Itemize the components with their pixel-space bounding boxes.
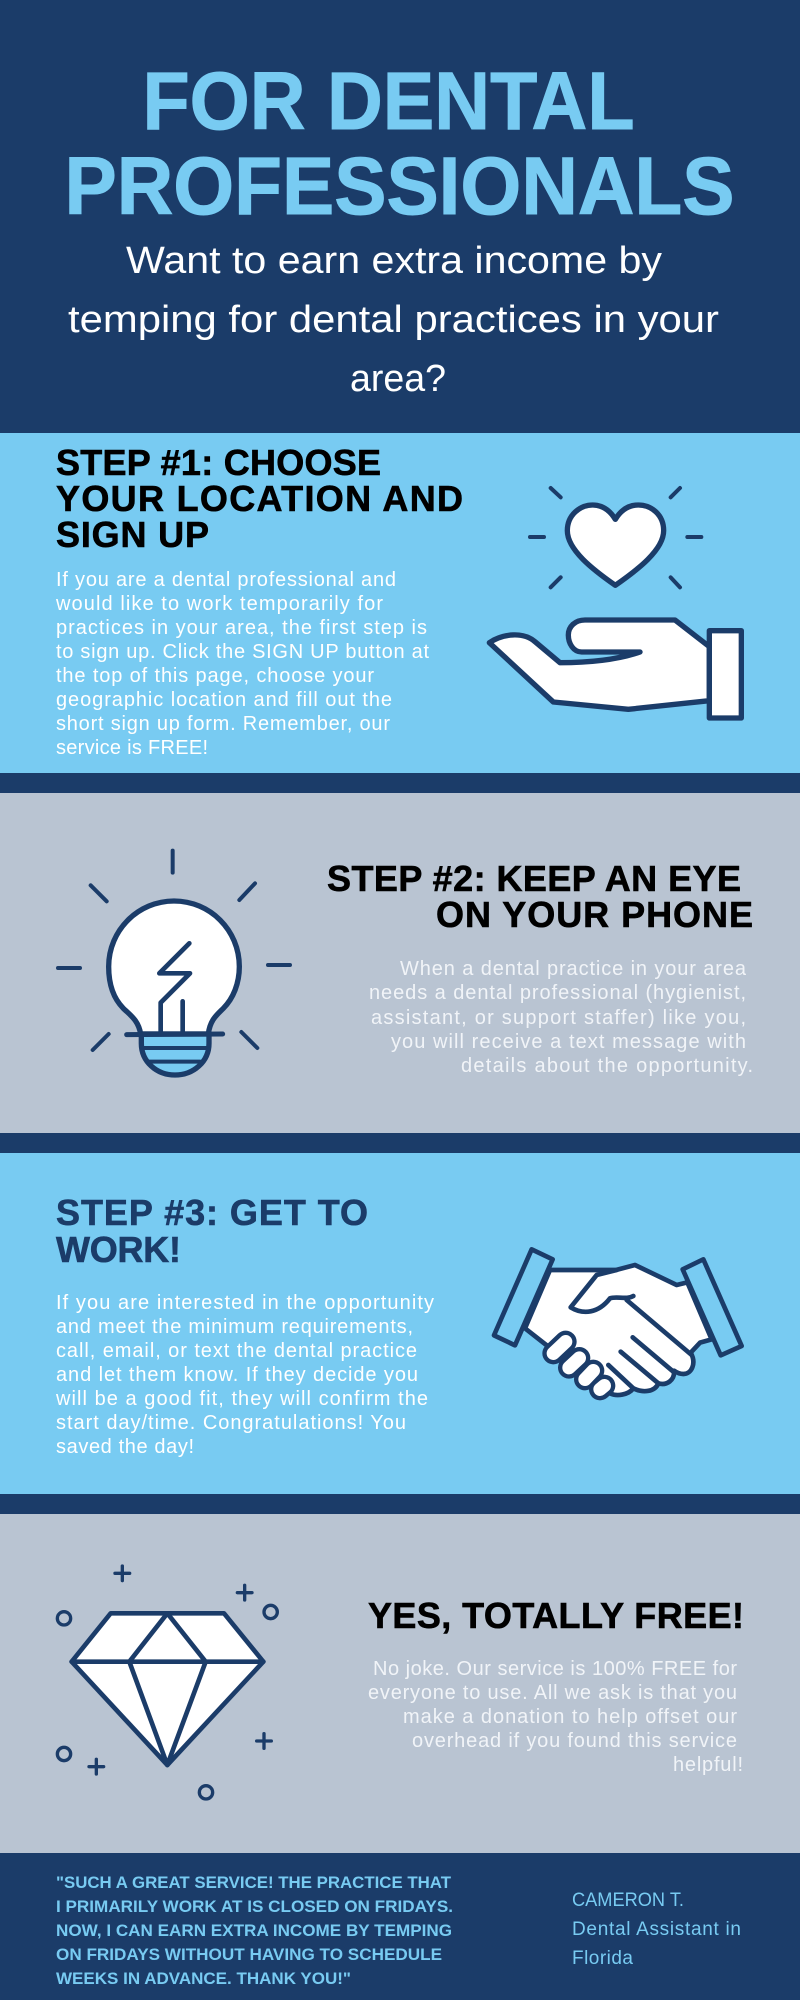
icon: light bulb: [58, 851, 290, 1075]
panel: testimonial footer: [0, 1853, 800, 2000]
title: PROFESSIONALS: [64, 141, 734, 232]
free body text: make a donation to help offset our: [403, 1706, 737, 1728]
panel: step 1: [0, 433, 800, 773]
panel: step 2: [0, 793, 800, 1133]
step 3 body text: will be a good fit, they will confirm the: [55, 1388, 428, 1410]
subtitle: temping for dental practices in your: [68, 299, 719, 341]
free body text: everyone to use. All we ask is that you: [368, 1682, 737, 1704]
step 3 body text: start day/time. Congratulations! You: [56, 1412, 406, 1434]
step 2 body text: When a dental practice in your area: [400, 958, 747, 980]
step 1 body text: geographic location and fill out the: [56, 689, 392, 711]
icon: hand holding heart: [489, 488, 741, 718]
testimonial quote: ON FRIDAYS WITHOUT HAVING TO SCHEDULE: [56, 1945, 442, 1964]
step 1 body text: [55, 569, 429, 759]
testimonial quote: WEEKS IN ADVANCE. THANK YOU!": [56, 1969, 351, 1988]
subtitle: [68, 240, 719, 400]
testimonial author: CAMERON T.: [572, 1890, 684, 1911]
step 2 heading: ON YOUR PHONE: [436, 894, 753, 935]
step 1 heading: SIGN UP: [56, 514, 209, 555]
step 1 body text: short sign up form. Remember, our: [56, 713, 390, 735]
header panel: [0, 0, 800, 433]
title: FOR DENTAL: [142, 56, 634, 147]
title: [64, 56, 734, 232]
step 3 body text: If you are interested in the opportunity: [56, 1292, 434, 1314]
step 1 body text: If you are a dental professional and: [56, 569, 396, 591]
step 3 body text: [55, 1292, 434, 1458]
testimonial author: Dental Assistant in: [572, 1919, 741, 1940]
testimonial quote: I PRIMARILY WORK AT IS CLOSED ON FRIDAYS.: [56, 1897, 453, 1916]
step 3 heading: WORK!: [56, 1229, 181, 1270]
testimonial author: Florida: [572, 1948, 633, 1969]
free heading: YES, TOTALLY FREE!: [368, 1595, 744, 1636]
step 3 heading: STEP #3: GET TO: [56, 1192, 368, 1233]
step 3 body text: and meet the minimum requirements,: [56, 1316, 413, 1338]
step 1 body text: service is FREE!: [56, 737, 208, 759]
step 2 body text: [369, 958, 753, 1077]
step 2 heading: [327, 858, 753, 935]
step 3 body text: and let them know. If they decide you: [56, 1364, 418, 1386]
testimonial quote: [56, 1873, 453, 1988]
icon: handshake: [494, 1249, 742, 1395]
panel: totally free: [0, 1514, 800, 1853]
step 1 heading: [56, 442, 463, 555]
step 1 body text: would like to work temporarily for: [55, 593, 383, 615]
step 2 body text: details about the opportunity.: [461, 1055, 753, 1077]
step 2 body text: assistant, or support staffer) like you,: [371, 1007, 746, 1029]
step 3 heading: [56, 1192, 368, 1270]
free body text: overhead if you found this service: [412, 1730, 737, 1752]
panel: step 3: [0, 1153, 800, 1494]
free body text: [368, 1658, 743, 1776]
subtitle: Want to earn extra income by: [126, 240, 662, 282]
step 3 body text: saved the day!: [56, 1436, 194, 1458]
free body text: No joke. Our service is 100% FREE for: [373, 1658, 737, 1680]
testimonial quote: NOW, I CAN EARN EXTRA INCOME BY TEMPING: [56, 1921, 452, 1940]
testimonial author: [572, 1890, 741, 1969]
step 2 heading: STEP #2: KEEP AN EYE: [327, 858, 741, 899]
step 1 heading: YOUR LOCATION AND: [56, 478, 463, 519]
step 2 body text: you will receive a text message with: [391, 1031, 746, 1053]
step 2 body text: needs a dental professional (hygienist,: [369, 982, 746, 1004]
testimonial quote: "SUCH A GREAT SERVICE! THE PRACTICE THAT: [56, 1873, 452, 1892]
step 3 body text: call, email, or text the dental practice: [56, 1340, 417, 1362]
icon: diamond: [57, 1566, 277, 1799]
step 1 body text: to sign up. Click the SIGN UP button at: [56, 641, 429, 663]
step 1 heading: STEP #1: CHOOSE: [56, 442, 381, 483]
step 1 body text: the top of this page, choose your: [56, 665, 374, 687]
subtitle: area?: [350, 358, 446, 400]
free body text: helpful!: [673, 1754, 743, 1776]
step 1 body text: practices in your area, the first step is: [56, 617, 427, 639]
